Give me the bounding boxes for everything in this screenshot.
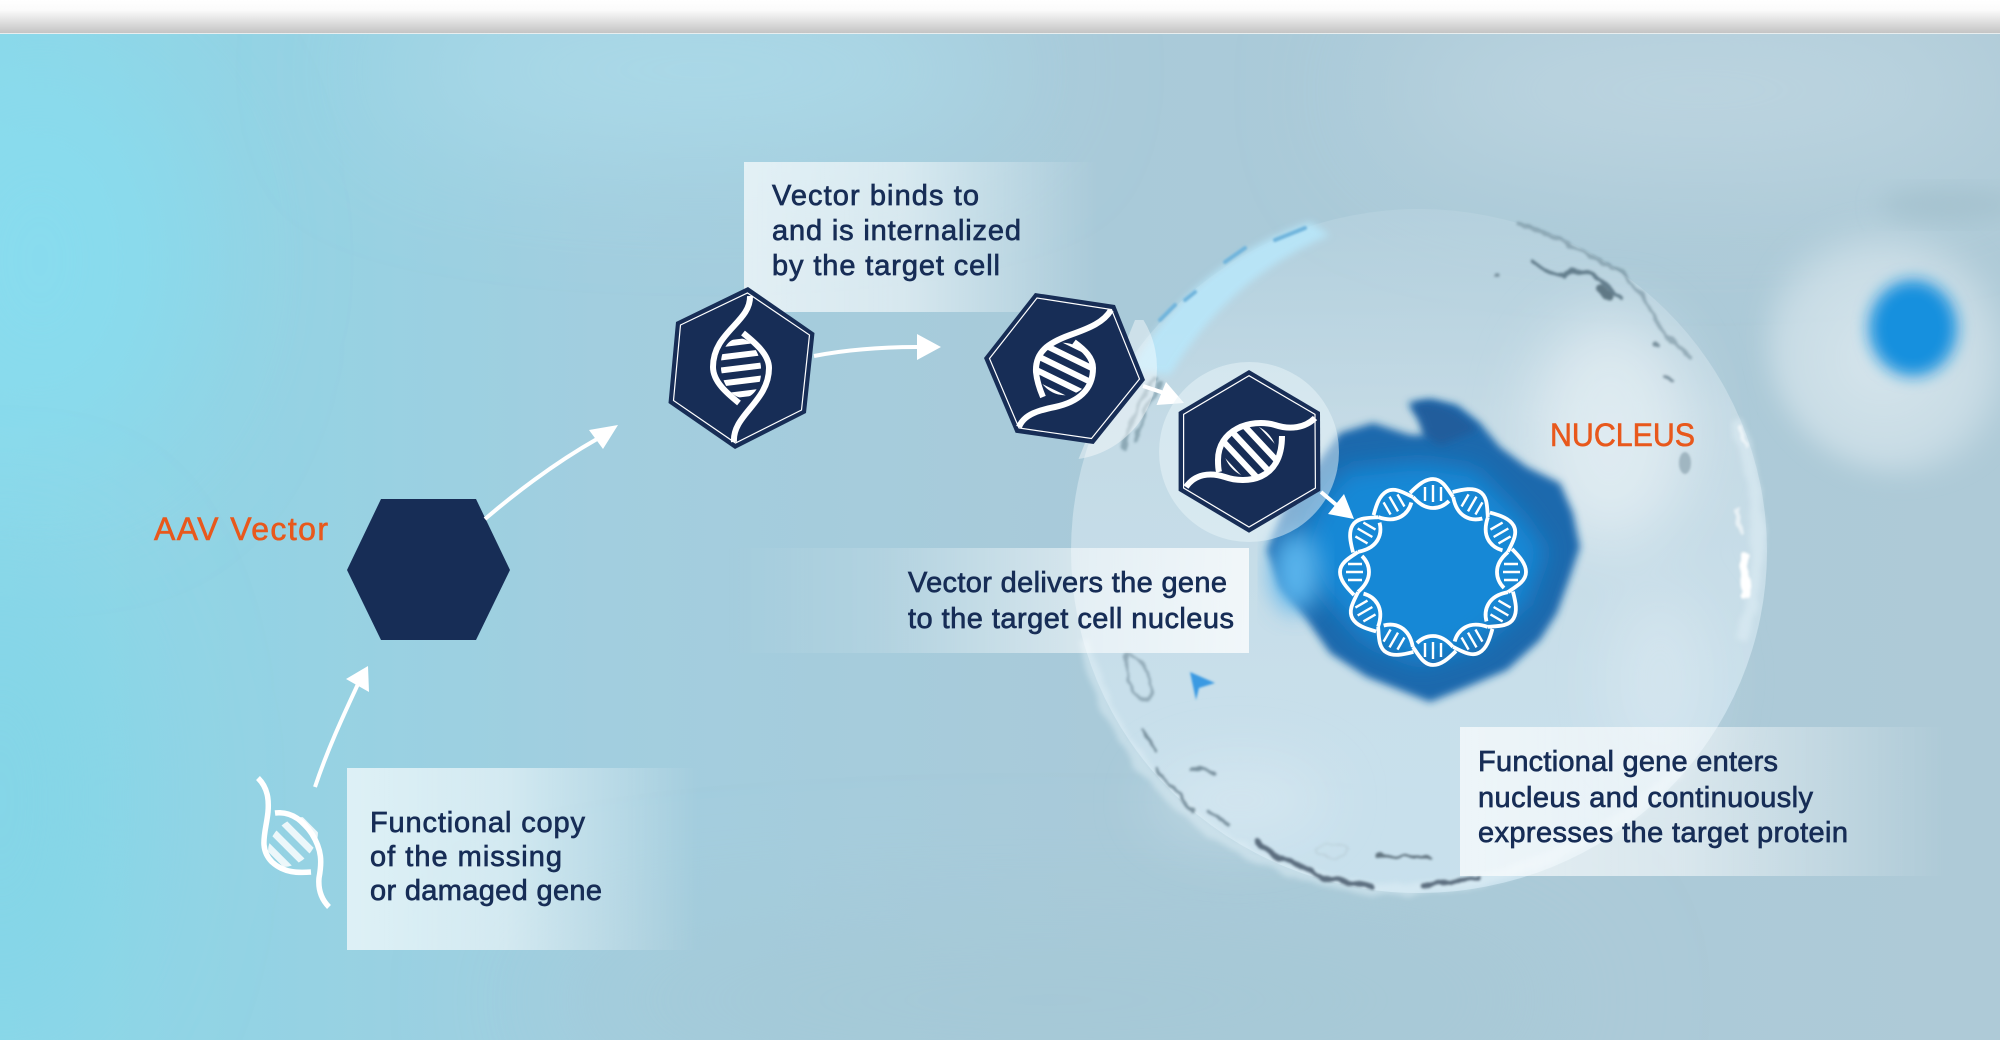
text box: vector delivers: Vector delivers the gene bbox=[908, 567, 1227, 599]
halo behind entering vector bbox=[1078, 320, 1157, 459]
label: NUCLEUS: NUCLEUS bbox=[1550, 417, 1695, 453]
arrow: gene to vector bbox=[315, 666, 369, 787]
text box: vector delivers bbox=[727, 548, 1249, 653]
arrow: entering cell bbox=[1143, 382, 1184, 405]
halo around internal vector bbox=[1159, 362, 1339, 542]
icon: hexagon with DNA bbox=[668, 287, 814, 449]
text box: vector binds: and is internalized bbox=[772, 215, 1021, 247]
icon: internal hexagon with DNA bbox=[1179, 370, 1320, 533]
text box: functional gene: Functional gene enters bbox=[1478, 746, 1778, 778]
icon: gene DNA bbox=[257, 778, 329, 907]
membrane blue flecks bbox=[1160, 228, 1305, 320]
cell bbox=[1071, 209, 1767, 893]
icon: rotated hexagon with DNA bbox=[984, 293, 1145, 444]
membrane rim bbox=[1085, 420, 1758, 889]
cell light patches bbox=[1150, 315, 1710, 840]
icon: circular DNA plasmid bbox=[1340, 479, 1526, 665]
arrow: vector to target cell bbox=[485, 425, 618, 519]
arrow: hexagon to hexagon bbox=[814, 334, 941, 360]
membrane speck bbox=[1679, 452, 1691, 474]
membrane white flecks bbox=[1738, 428, 1746, 595]
text box: functional gene: nucleus and continuously bbox=[1478, 782, 1814, 814]
text box: vector binds bbox=[744, 162, 1100, 312]
blurred neighbouring cell bbox=[1765, 189, 2000, 475]
arrow: into nucleus bbox=[1321, 492, 1354, 519]
nucleus bbox=[1267, 399, 1580, 702]
membrane blue fragment bbox=[1190, 672, 1215, 700]
text box: functional gene: expresses the target protein bbox=[1478, 817, 1848, 849]
text box: vector binds: Vector binds to bbox=[772, 180, 979, 212]
label: AAV Vector: AAV Vector bbox=[154, 511, 328, 547]
text box: functional gene bbox=[1460, 727, 1950, 876]
membrane dark flecks bbox=[1125, 223, 1690, 887]
text box: vector binds: by the target cell bbox=[772, 250, 1000, 282]
text box: vector delivers: to the target cell nucleus bbox=[908, 603, 1234, 635]
text box: functional copy: of the missing bbox=[370, 841, 562, 873]
text box: functional copy: Functional copy bbox=[370, 807, 586, 839]
text box: functional copy: or damaged gene bbox=[370, 875, 602, 907]
top page strip bbox=[0, 0, 2000, 35]
text box: functional copy bbox=[347, 768, 700, 950]
icon: AAV vector hexagon bbox=[347, 499, 510, 640]
membrane blue highlight bbox=[1130, 222, 1330, 375]
